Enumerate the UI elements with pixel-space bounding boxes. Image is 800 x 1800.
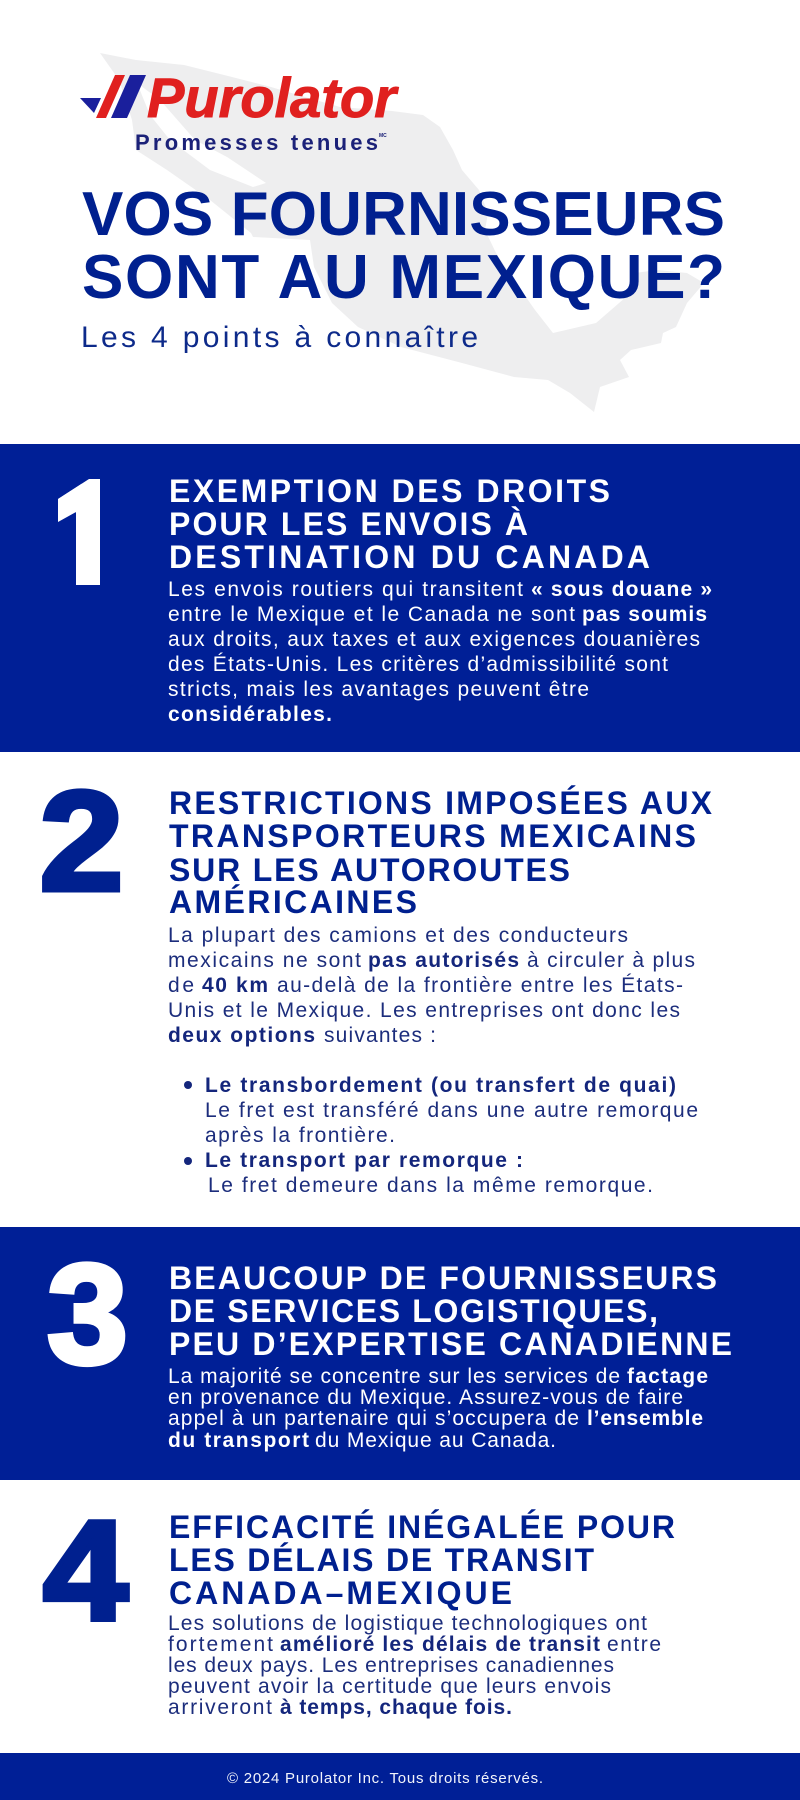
heading 4: LES DÉLAIS DE TRANSIT xyxy=(169,1542,594,1578)
background map of Mexico xyxy=(100,53,704,412)
body 4: amélioré les délais de transit xyxy=(280,1633,600,1656)
logo: Purolator: MC xyxy=(379,133,387,139)
heading 3 xyxy=(169,1260,732,1362)
bullet list: Le fret demeure dans la même remorque. xyxy=(208,1174,653,1197)
body 4: arriveront xyxy=(168,1696,272,1719)
body 1: Les envois routiers qui transitent xyxy=(168,578,523,601)
panel 2: restrictions xyxy=(40,762,713,1197)
body 2: au-delà de la frontière entre les États- xyxy=(277,974,683,997)
body 4: peuvent avoir la certitude que leurs envois xyxy=(168,1675,611,1698)
body 3: La majorité se concentre sur les services de xyxy=(168,1365,620,1388)
logo: Purolator: Purolator xyxy=(147,66,399,129)
heading 3: DE SERVICES LOGISTIQUES, xyxy=(169,1293,658,1329)
body 3: factage xyxy=(627,1365,708,1388)
body 1: entre le Mexique et le Canada ne sont xyxy=(168,603,575,626)
heading 4 xyxy=(169,1509,675,1611)
heading 1: EXEMPTION DES DROITS xyxy=(169,473,610,509)
heading 4: CANADA–MEXIQUE xyxy=(169,1575,512,1611)
body 4: à temps, chaque fois. xyxy=(280,1696,512,1719)
body 1: considérables. xyxy=(168,703,332,726)
body 2: à circuler à plus xyxy=(527,949,695,972)
heading 2: TRANSPORTEURS MEXICAINS xyxy=(169,818,696,854)
heading 1: DESTINATION DU CANADA xyxy=(169,539,650,575)
body 4: fortement xyxy=(168,1633,273,1656)
body 2: Unis et le Mexique. Les entreprises ont donc les xyxy=(168,999,680,1022)
bullet list: Le transbordement (ou transfert de quai) xyxy=(205,1074,676,1097)
bullet list: Le fret est transféré dans une autre remorque xyxy=(205,1099,698,1122)
body 2: La plupart des camions et des conducteurs xyxy=(168,924,628,947)
logo: Purolator: Promesses tenues xyxy=(135,130,378,155)
body 1: aux droits, aux taxes et aux exigences douanières xyxy=(168,628,700,651)
body 3: en provenance du Mexique. Assurez-vous de faire xyxy=(168,1386,683,1409)
body 3: du Mexique au Canada. xyxy=(315,1429,556,1452)
body 2 xyxy=(168,924,695,1047)
title: VOS FOURNISSEURS xyxy=(82,180,725,249)
body 3: du transport xyxy=(168,1429,309,1452)
body 3: appel à un partenaire qui s’occupera de xyxy=(168,1407,579,1430)
bullet list xyxy=(184,1074,698,1197)
panel 4: efficacité xyxy=(43,1492,675,1719)
title xyxy=(82,180,725,312)
logo: Purolator xyxy=(80,66,399,155)
icon: logo check mark xyxy=(80,75,146,118)
number 3: 3 xyxy=(47,1235,128,1394)
footer: © 2024 Purolator Inc. Tous droits réservés. xyxy=(227,1770,543,1787)
heading 2: RESTRICTIONS IMPOSÉES AUX xyxy=(169,785,713,821)
number 1: 1 xyxy=(40,451,123,619)
subtitle: Les 4 points à connaître xyxy=(81,321,478,354)
panel 1: exemption des droits xyxy=(0,444,800,752)
panel 3: fournisseurs logistiques xyxy=(0,1227,800,1480)
body 2: pas autorisés xyxy=(368,949,519,972)
heading 1: POUR LES ENVOIS À xyxy=(169,506,528,542)
body 1 xyxy=(168,578,712,726)
footer xyxy=(0,1753,800,1800)
heading 3: PEU D’EXPERTISE CANADIENNE xyxy=(169,1326,732,1362)
heading 4: EFFICACITÉ INÉGALÉE POUR xyxy=(169,1509,675,1545)
heading 2 xyxy=(169,785,713,920)
number 2: 2 xyxy=(40,762,124,921)
body 2: deux options xyxy=(168,1024,315,1047)
body 2: suivantes : xyxy=(324,1024,436,1047)
body 1: des États-Unis. Les critères d’admissibilité sont xyxy=(168,653,668,676)
heading 1 xyxy=(169,473,650,575)
body 4: les deux pays. Les entreprises canadiennes xyxy=(168,1654,614,1677)
heading 3: BEAUCOUP DE FOURNISSEURS xyxy=(169,1260,717,1296)
body 2: 40 km xyxy=(202,974,268,997)
body 4 xyxy=(168,1612,661,1719)
body 4: entre xyxy=(607,1633,661,1656)
bullet list: après la frontière. xyxy=(205,1124,395,1147)
title: SONT AU MEXIQUE? xyxy=(82,243,725,312)
body 3 xyxy=(168,1365,708,1452)
heading 2: SUR LES AUTOROUTES xyxy=(169,852,570,888)
body 1: « sous douane » xyxy=(531,578,712,601)
body 3: l’ensemble xyxy=(587,1407,703,1430)
body 1: pas soumis xyxy=(582,603,707,626)
body 2: de xyxy=(168,974,194,997)
heading 2: AMÉRICAINES xyxy=(169,884,417,920)
number 4: 4 xyxy=(43,1492,128,1650)
body 2: mexicains ne sont xyxy=(168,949,361,972)
body 1: stricts, mais les avantages peuvent être xyxy=(168,678,589,701)
body 4: Les solutions de logistique technologiques ont xyxy=(168,1612,647,1635)
bullet list: Le transport par remorque : xyxy=(205,1149,523,1172)
